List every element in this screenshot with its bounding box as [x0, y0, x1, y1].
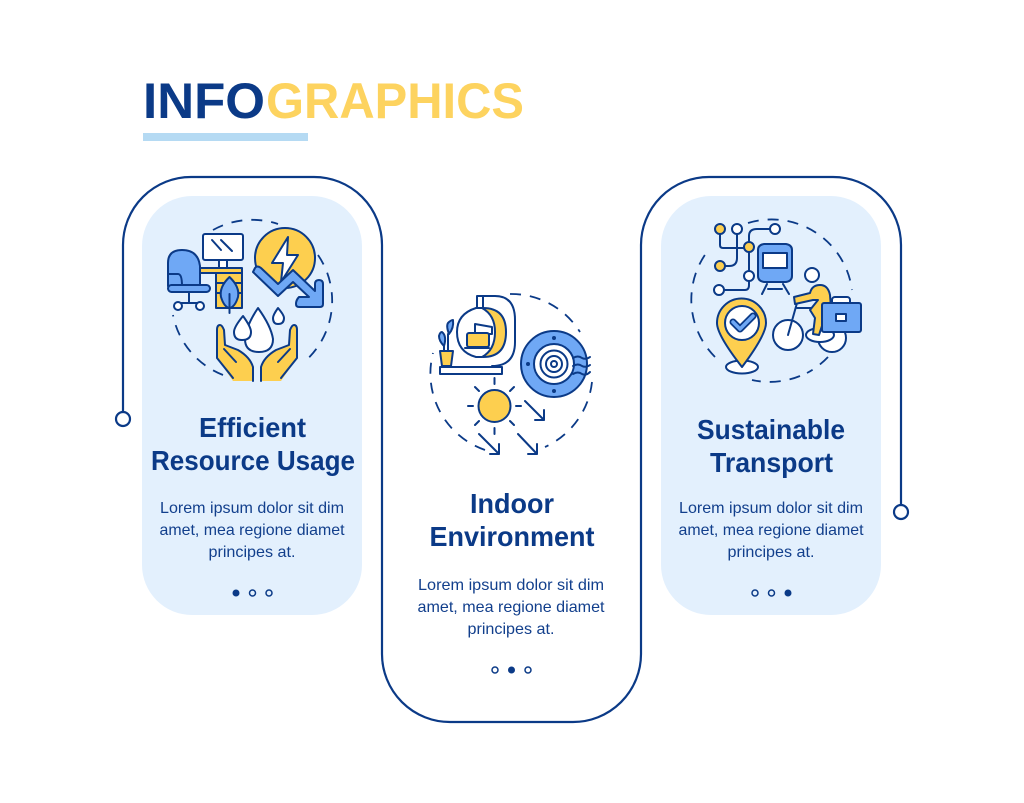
icon: hanging chair: [440, 296, 515, 374]
icon: transit network map: [714, 224, 780, 295]
heading: sustainable transport: [697, 414, 845, 478]
text: first card description: Lorem ipsum dolor sit dim: [160, 500, 344, 517]
pagination dots: third card: [752, 590, 792, 596]
heading: efficient resource usage: [151, 412, 355, 476]
text: third card description: [678, 500, 864, 561]
pagination dots: second card: [492, 666, 531, 674]
text: second card description: principes at.: [468, 621, 554, 638]
heading: efficient resource usage: Efficient: [199, 412, 306, 443]
heading: sustainable transport: Transport: [710, 447, 833, 478]
title: [143, 73, 524, 129]
dashed circle: [430, 294, 592, 450]
icon: indoor environment: [430, 294, 592, 454]
heading: efficient resource usage: Resource Usage: [151, 445, 355, 476]
icon: office chair: [168, 250, 210, 310]
text: second card description: [418, 577, 605, 638]
icon: efficient resource usage: [168, 220, 332, 381]
pagination dots: first card: [232, 590, 272, 596]
icon: sustainable transport: [691, 219, 861, 382]
icon: hands: [217, 325, 297, 381]
connected outline of the cards: [116, 177, 908, 722]
icon: water drops: [234, 308, 284, 352]
icon: train: [758, 244, 792, 294]
panel: third card background: [661, 196, 881, 615]
icon: round air vent: [521, 331, 590, 397]
icon: cyclist with briefcase: [773, 268, 861, 352]
icon: computer and desk: [200, 234, 243, 313]
text: third card description: Lorem ipsum dolor sit dim: [679, 500, 863, 517]
text: first card description: principes at.: [208, 544, 296, 561]
text: third card description: amet, mea regione diamet: [678, 522, 864, 539]
text: first card description: [160, 500, 345, 561]
title: GRAPHICS: [266, 73, 524, 129]
title underline: [143, 133, 308, 141]
icon: energy reduction: [253, 228, 323, 307]
title: INFO: [143, 73, 265, 129]
text: first card description: amet, mea regione diamet: [160, 522, 345, 539]
heading: sustainable transport: Sustainable: [697, 414, 845, 445]
text: third card description: principes at.: [728, 544, 814, 561]
heading: indoor environment: [430, 488, 594, 552]
heading: indoor environment: Environment: [430, 521, 594, 552]
text: second card description: Lorem ipsum dolor sit dim: [418, 577, 604, 594]
icon: location pin: [717, 299, 766, 374]
panel: first card background: [142, 196, 362, 615]
dashed circle: [691, 219, 852, 382]
icon: sun and rays: [468, 378, 544, 454]
icon: potted plant: [439, 320, 453, 366]
heading: indoor environment: Indoor: [470, 488, 554, 519]
text: second card description: amet, mea regione diamet: [418, 599, 605, 616]
dashed circle: [173, 220, 332, 375]
